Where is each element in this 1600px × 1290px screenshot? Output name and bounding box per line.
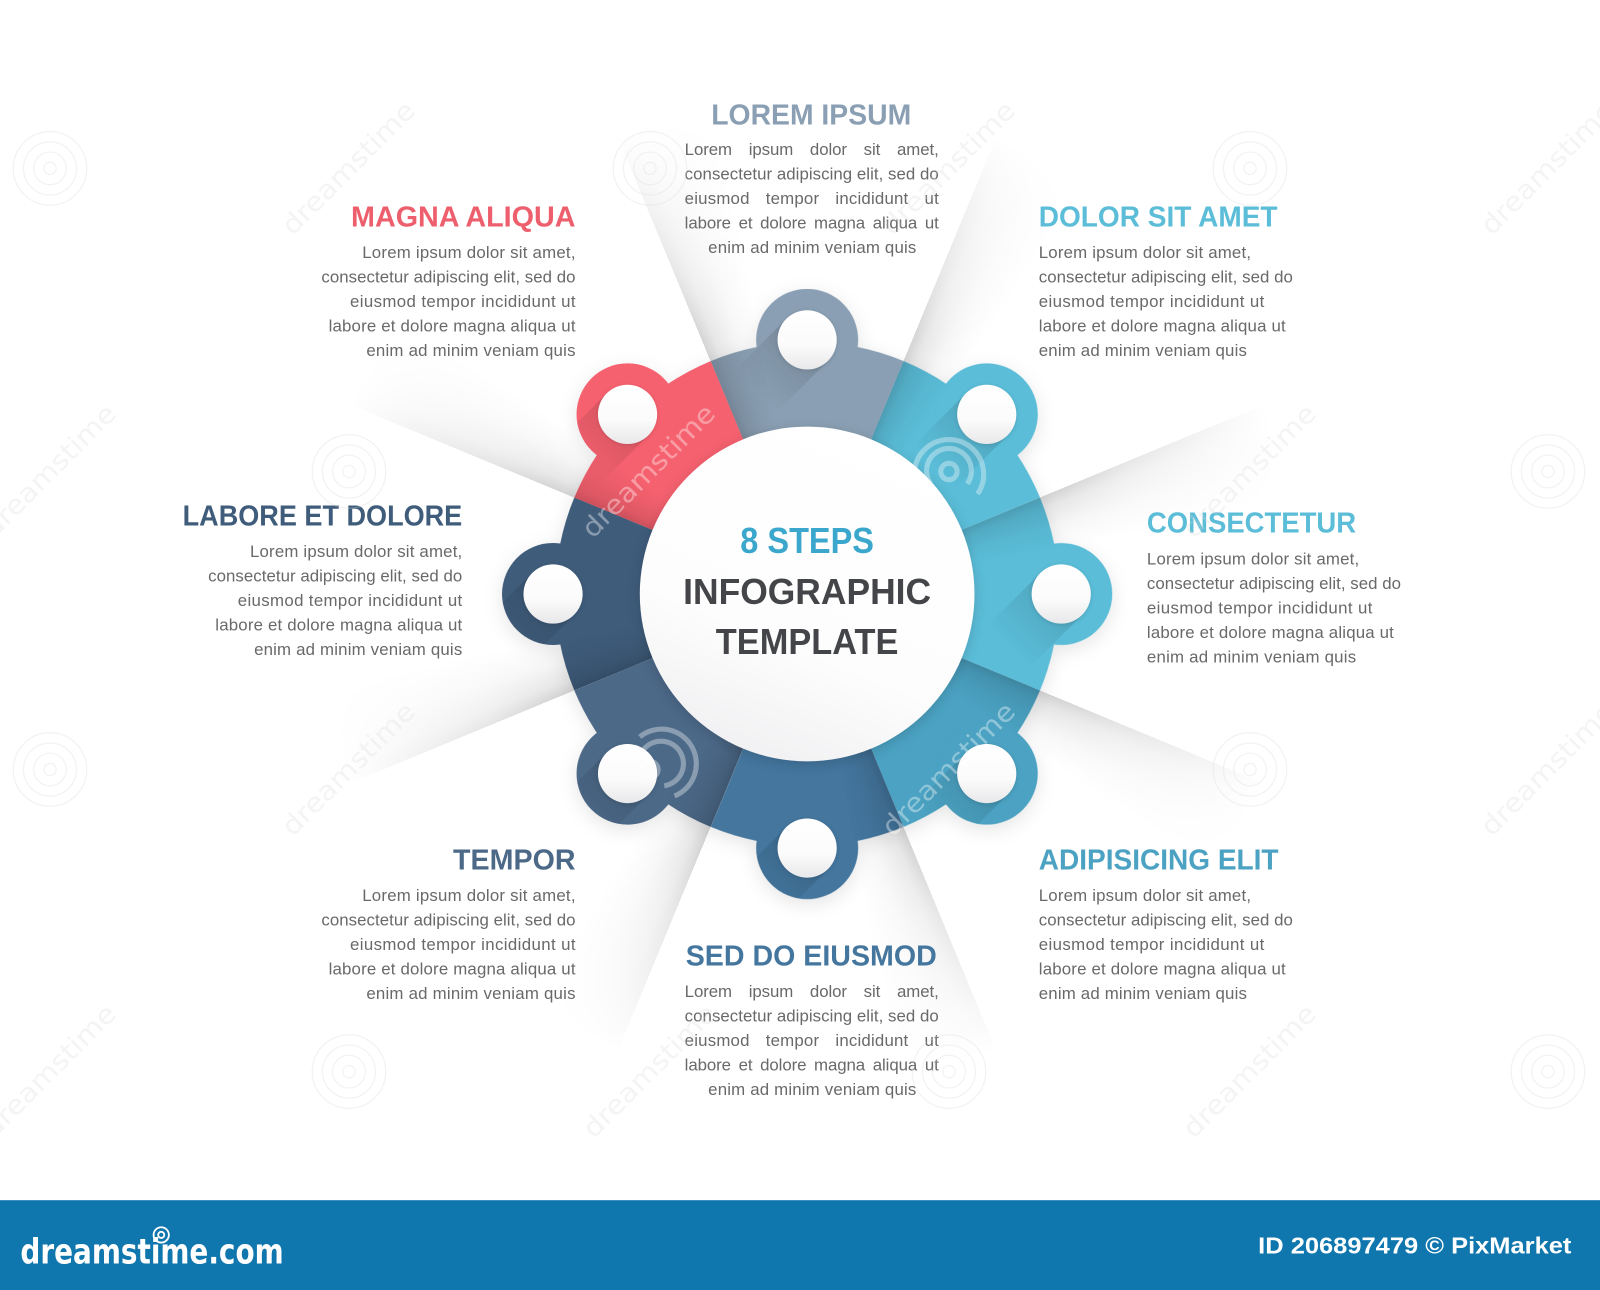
step: magna aliqua: Lorem ipsum dolor sit amet, [362,243,576,262]
centre title [683,521,931,662]
watermark text on the ring [576,398,1022,842]
watermark text: dreamstime [1177,398,1323,544]
step: dolor sit amet: eiusmod tempor incididunt ut [1039,292,1265,311]
step: dolor sit amet: consectetur adipiscing elit, sed do [1039,268,1293,287]
step: tempor: enim ad minim veniam quis [366,984,576,1003]
step: sed do eiusmod: SED DO EIUSMOD [686,940,937,972]
step: lorem ipsum: consectetur adipiscing elit, sed do [685,165,939,184]
segment: labore et dolore [502,498,666,690]
centre title: TEMPLATE [716,622,898,662]
step: consectetur: Lorem ipsum dolor sit amet, [1147,549,1359,568]
footer image id: ID 206897479 © PixMarket [1258,1232,1572,1258]
step: adipisicing elit: eiusmod tempor incididunt ut [1039,935,1265,954]
watermark text: dreamstime [876,95,1022,241]
step: magna aliqua: labore et dolore magna aliqua ut [329,317,576,336]
watermark text: dreamstime [276,696,422,842]
step: lorem ipsum: LOREM IPSUM [711,100,911,132]
watermark text: dreamstime [577,998,723,1144]
watermark spirals [13,132,1585,1108]
step: lorem ipsum: Lorem ipsum dolor sit amet, [685,140,939,159]
watermark spirals on the ring [640,440,984,796]
segment: magna aliqua [561,348,775,562]
step: sed do eiusmod: labore et dolore magna aliqua ut [685,1056,939,1075]
step: magna aliqua: enim ad minim veniam quis [366,341,576,360]
step: consectetur: CONSECTETUR [1147,508,1356,540]
watermark text on the ring: dreamstime [576,398,722,544]
step: magna aliqua: consectetur adipiscing elit, sed do [321,268,576,287]
step: dolor sit amet [1039,202,1293,360]
centre title: INFOGRAPHIC [683,572,931,612]
step: consectetur: eiusmod tempor incididunt ut [1147,598,1373,617]
step: consectetur: labore et dolore magna aliqua ut [1147,623,1394,642]
step: labore et dolore: Lorem ipsum dolor sit amet, [250,542,462,561]
segment: sed do eiusmod [711,735,904,899]
step: tempor: labore et dolore magna aliqua ut [329,960,576,979]
step: tempor [321,845,576,1003]
step: sed do eiusmod [685,940,939,1099]
step: labore et dolore: consectetur adipiscing elit, sed do [208,567,462,586]
step: adipisicing elit: ADIPISICING ELIT [1039,845,1279,877]
step: consectetur [1147,508,1401,666]
step: lorem ipsum: eiusmod tempor incididunt ut [685,189,939,208]
step: labore et dolore [183,501,463,659]
step: tempor: eiusmod tempor incididunt ut [350,935,576,954]
step: tempor: consectetur adipiscing elit, sed do [321,911,576,930]
footer bar [0,1200,1600,1290]
step: tempor: Lorem ipsum dolor sit amet, [362,886,576,905]
step: labore et dolore: enim ad minim veniam quis [254,640,462,659]
segment: adipisicing elit [839,626,1054,840]
long shadows of the knob circles [480,319,1082,921]
step: adipisicing elit: Lorem ipsum dolor sit amet, [1039,886,1251,905]
step: lorem ipsum: labore et dolore magna aliqua ut [685,214,939,233]
step: adipisicing elit: labore et dolore magna aliqua ut [1039,960,1286,979]
step: sed do eiusmod: enim ad minim veniam quis [708,1080,916,1099]
watermark text: dreamstime [276,95,422,241]
step: lorem ipsum [685,100,939,257]
step: tempor: TEMPOR [453,845,576,877]
segment: consectetur [949,498,1112,690]
centre title: 8 STEPS [740,521,874,561]
white knob circles [523,310,1091,878]
step: dolor sit amet: DOLOR SIT AMET [1039,202,1278,234]
radial shadow rays between segments [395,182,1219,1006]
step: magna aliqua: MAGNA ALIQUA [351,202,576,234]
ring of eight segments [498,289,1116,908]
step: lorem ipsum: enim ad minim veniam quis [708,238,916,257]
step: labore et dolore: eiusmod tempor incididunt ut [238,591,463,610]
step: dolor sit amet: labore et dolore magna aliqua ut [1039,317,1286,336]
segment: dolor sit amet [839,348,1054,562]
step: dolor sit amet: Lorem ipsum dolor sit amet, [1039,243,1251,262]
step: magna aliqua [321,202,576,360]
step: magna aliqua: eiusmod tempor incididunt ut [350,292,576,311]
step: consectetur: consectetur adipiscing elit, sed do [1147,574,1401,593]
step: labore et dolore: LABORE ET DOLORE [183,501,462,533]
step: sed do eiusmod: Lorem ipsum dolor sit amet, [685,982,939,1001]
step: dolor sit amet: enim ad minim veniam quis [1039,341,1247,360]
segment: lorem ipsum [711,289,904,453]
step: adipisicing elit: consectetur adipiscing elit, sed do [1039,911,1293,930]
watermark text: dreamstime [1177,998,1323,1144]
footer logo: dreamstime.com [20,1232,284,1272]
segment: tempor [561,626,775,840]
step: sed do eiusmod: eiusmod tempor incididunt ut [685,1031,939,1050]
step: labore et dolore: labore et dolore magna aliqua ut [215,616,463,635]
step: adipisicing elit [1039,845,1293,1003]
centre hub circle [640,427,974,761]
step: sed do eiusmod: consectetur adipiscing elit, sed do [685,1007,939,1026]
step: adipisicing elit: enim ad minim veniam quis [1039,984,1247,1003]
step: consectetur: enim ad minim veniam quis [1147,647,1356,666]
watermark text on the ring: dreamstime [876,696,1022,842]
